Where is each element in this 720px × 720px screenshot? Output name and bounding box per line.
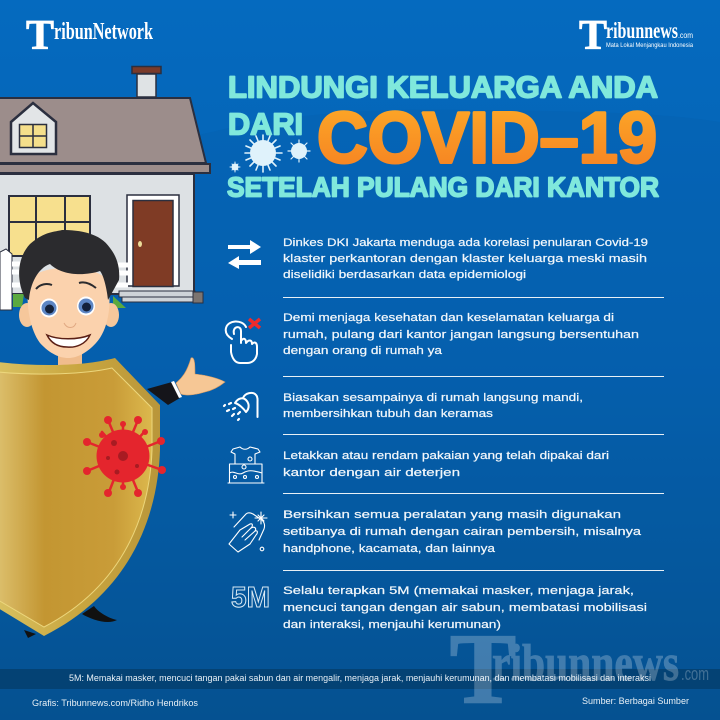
icon: 5M outline: 5M (231, 582, 270, 614)
text block (283, 509, 642, 555)
text block: membersihkan tubuh dan keramas (283, 408, 493, 420)
text block: Biasakan sesampainya di rumah langsung mandi, (283, 392, 583, 404)
window (9, 196, 90, 256)
title: LINDUNGI KELUARGA ANDA (228, 70, 658, 104)
shield (0, 358, 160, 636)
ears (19, 303, 119, 327)
text block (283, 450, 609, 479)
nose (64, 323, 76, 328)
eave (0, 164, 210, 173)
item 3: shower (224, 392, 583, 420)
title (227, 70, 659, 202)
illustration: boy with shield (0, 230, 225, 638)
footnote bar: 5M: Memakai masker, mencuci tangan pakai sabun dan air mengalir, menjaga jarak, menjauhi kerumunan, dan membatasi mobilisasi dan interaksi (69, 673, 651, 683)
text block: dengan orang di rumah ya (283, 345, 443, 357)
item 1: correlation (228, 237, 648, 281)
text block: kantor dengan air deterjen (283, 467, 460, 479)
eyes (36, 282, 96, 318)
logo: Tribunnews (579, 13, 693, 59)
chimney (132, 66, 161, 97)
icon: laundry basin (228, 447, 264, 483)
watermark: ribunnews (492, 635, 679, 692)
roof (0, 98, 206, 163)
text block: diselidiki berdasarkan data epidemiologi (283, 269, 526, 281)
hair (19, 230, 119, 300)
title: DARI (228, 106, 303, 142)
mouth (47, 335, 90, 347)
item 6: 5M (231, 582, 647, 631)
item 4: clothes (228, 447, 609, 483)
steps (119, 291, 203, 303)
text block: klaster perkantoran dengan klaster keluarga meski masih (283, 253, 647, 265)
text block: setibanya di rumah dengan cairan pembersih, misalnya (283, 526, 642, 538)
text block (283, 585, 647, 631)
logo: TribunNetwork: ribunNetwork (54, 19, 153, 45)
item 5: cleaning (229, 509, 642, 555)
text block: dan interaksi, menjauhi kerumunan) (283, 619, 501, 631)
icon: hand wiping (229, 512, 267, 552)
fence (0, 249, 128, 310)
icon: shower (224, 393, 258, 420)
icon: red virus (83, 416, 166, 497)
icon: title virus particles (230, 135, 310, 172)
text block: Selalu terapkan 5M (memakai masker, menjaga jarak, (283, 585, 634, 597)
wall (0, 174, 194, 294)
item 2: no touching (226, 312, 639, 363)
icon: hand with red cross (226, 319, 260, 363)
logo: Tribunnews: T (579, 13, 607, 59)
text block: Demi menjaga kesehatan dan keselamatan keluarga di (283, 312, 614, 324)
arm (147, 358, 225, 405)
text block: mencuci tangan dengan air sabun, membatasi mobilisasi (283, 602, 647, 614)
title: SETELAH PULANG DARI KANTOR (227, 172, 659, 202)
logo: Tribunnews: Mata Lokal Menjangkau Indonesia (606, 42, 693, 49)
watermark: .com (681, 664, 709, 684)
logo: Tribunnews: ribunnews (606, 18, 678, 43)
logo: Tribunnews: .com (678, 31, 693, 40)
text block: rumah, pulang dari kantor jangan langsung bersentuhan (283, 329, 639, 341)
door (127, 195, 179, 286)
logo: TribunNetwork (26, 13, 153, 59)
feet (24, 606, 117, 638)
text block (283, 312, 639, 357)
source: Sumber: Berbagai Sumber (582, 696, 689, 706)
footnote bar (0, 669, 720, 689)
text block: Bersihkan semua peralatan yang masih digunakan (283, 509, 621, 521)
title: COVID–19 (317, 98, 657, 178)
watermark (450, 613, 709, 720)
neck (58, 350, 82, 366)
divider lines (283, 298, 664, 570)
face (28, 268, 110, 358)
illustration: house (0, 66, 210, 310)
credit: Grafis: Tribunnews.com/Ridho Hendrikos (32, 698, 198, 708)
text block: Dinkes DKI Jakarta menduga ada korelasi penularan Covid-19 (283, 237, 648, 249)
text block (283, 392, 583, 420)
text block: handphone, kacamata, dan lainnya (283, 543, 496, 555)
icon: arrows (228, 240, 261, 269)
logo: TribunNetwork: T (26, 13, 54, 59)
text block: Letakkan atau rendam pakaian yang telah dipakai dari (283, 450, 609, 462)
text block (283, 237, 648, 281)
dormer (11, 103, 56, 154)
